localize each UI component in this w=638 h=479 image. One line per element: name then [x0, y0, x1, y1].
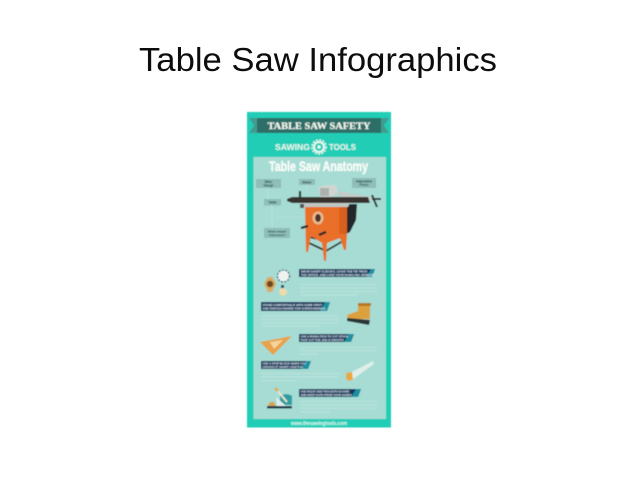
tip banner 4 [261, 361, 311, 369]
tip text 3 [300, 348, 377, 354]
tip banner 3 [299, 334, 354, 342]
saw miter gauge [299, 191, 301, 197]
heading: table saw anatomy: Table Saw Anatomy [269, 159, 368, 174]
label: adjustable fence: Adjustable [356, 180, 372, 184]
logo: sawing tools [275, 140, 357, 154]
tip banner 2: AND ENOUGH WHERE FOR SURROUNDINGS [262, 306, 325, 310]
saw table top [287, 197, 370, 203]
tip banner 4: CROSSCUT SHORT LENGTHS [262, 365, 303, 369]
logo: sawing tools: SAWING [275, 143, 310, 152]
saw fence rail [337, 191, 380, 200]
heading ribbon: table saw safety [249, 118, 389, 133]
icon: saw blade and push stick [267, 388, 292, 408]
tip text 2 [261, 316, 339, 326]
saw rear motor cover [346, 204, 357, 234]
tip banner 1 [299, 269, 375, 277]
icon: hand saw [346, 361, 374, 381]
heading ribbon: table saw safety: TABLE SAW SAFETY [268, 122, 371, 132]
tip banner 5: AND KEEP SAFE FROM YOUR HANDS [300, 393, 352, 397]
footer url: www.thesawingtools.com [290, 421, 348, 427]
tip banner 2: STAND COMFORTABLE WITH SOME FIRST [262, 303, 322, 307]
label: blade height adjustment: Blade Height [268, 230, 286, 234]
tip banner 2 [261, 302, 330, 311]
label: adjustable fence: Fence [359, 183, 369, 187]
tip 1: sleeves [264, 269, 377, 296]
tip banner 4: USE A STOP BLOCK WHEN YOU [262, 362, 306, 366]
tip text 5 [300, 402, 378, 412]
tip 4: stop block [261, 361, 374, 381]
label: miter gauge: Gauge [264, 184, 274, 188]
label: miter gauge [256, 179, 281, 188]
label: blade [299, 179, 315, 185]
label: blade: Blade [302, 180, 312, 184]
tip banner 1: THE OFFICE, AND LOSE YOUR DANGLING JEWELRY [301, 273, 375, 277]
saw blade guard [318, 185, 338, 197]
saw fence handle [372, 195, 381, 207]
logo: sawing tools: TOOLS [329, 143, 357, 152]
saw lower braces [309, 236, 344, 251]
tip 3: push stick [260, 334, 377, 355]
icon: triangle square [260, 336, 292, 355]
label: miter gauge: Miter [265, 180, 273, 184]
label: blade height adjustment: Adjustment [269, 233, 285, 237]
label: blade height adjustment [264, 228, 290, 238]
saw orange cabinet [305, 206, 347, 261]
saw crank handles [301, 226, 326, 235]
title: Table Saw Infographics [139, 41, 497, 78]
tip banner 3: THAT CUT THE JOB IS SMOOTH [300, 338, 344, 342]
tip 2: footing [261, 302, 371, 326]
icon: work boot [347, 303, 371, 325]
tip banner 5 [299, 389, 361, 397]
panel: infographic poster [247, 112, 391, 428]
saw blade height wheel [312, 212, 324, 224]
icon: watch and accessories [264, 270, 290, 296]
illustration: table saw [287, 185, 381, 261]
tip 5: guard [267, 388, 378, 412]
label: table [264, 199, 281, 206]
label: adjustable fence [352, 178, 376, 188]
label: table: Table [268, 200, 277, 204]
tip banner 3: USE A RIVING PICK TO CUT STOCK [300, 334, 348, 338]
tip banner 5: USE RIGHT AND TOO-BOTH GUARD [300, 390, 349, 394]
tip text 4 [261, 374, 340, 380]
tip text 1 [300, 284, 377, 295]
icon: gear [312, 140, 326, 154]
tip banner 1: WEAR SHORT SLEEVES, LEAVE THE TIE TRICK [301, 270, 368, 274]
